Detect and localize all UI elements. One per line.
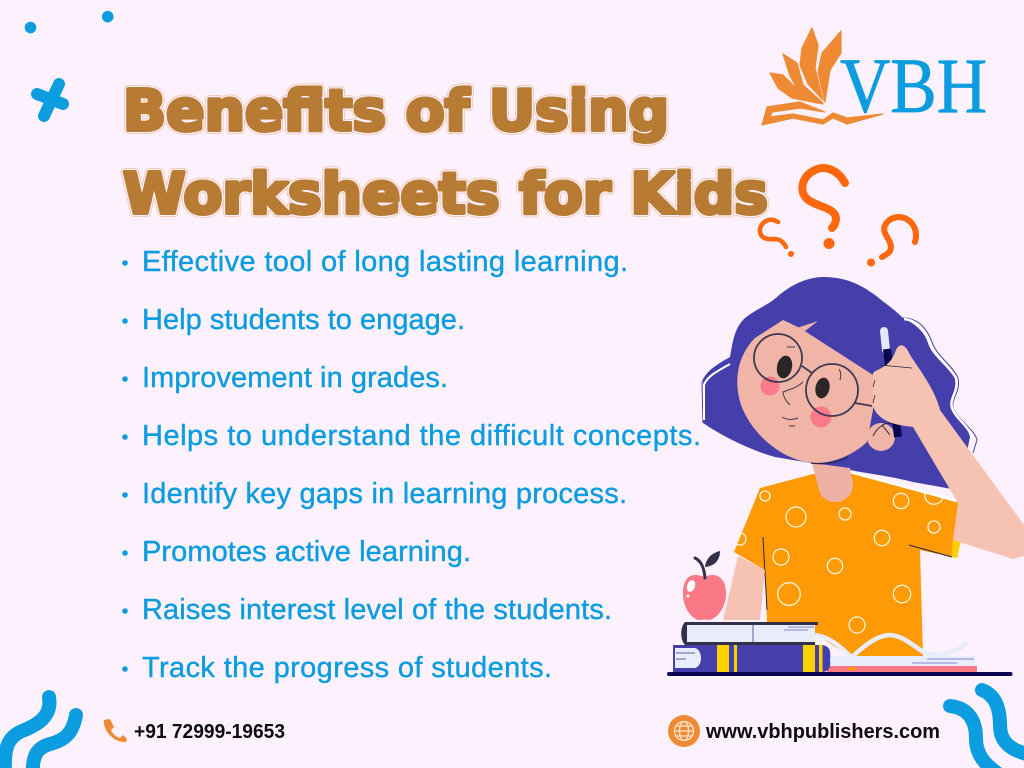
bullet list: Help students to engage. [142,304,465,336]
bullet list: Identify key gaps in learning process. [142,478,627,510]
title: Benefits of Using [123,79,669,144]
bullet list: Helps to understand the difficult concepts. [142,420,701,452]
open book [815,635,977,672]
contact: phone: +91 72999-19653 [134,721,285,743]
bullet list: Raises interest level of the students. [142,594,612,626]
decoration: bottom-left waves [5,697,76,768]
title [123,79,768,227]
icon: glasses [754,334,872,416]
icon: eyes [775,354,832,400]
bullet list [122,246,701,684]
contact: website [668,715,940,747]
title: Worksheets for Kids [123,162,768,227]
neck [812,463,853,502]
bullet list: Effective tool of long lasting learning. [142,246,628,278]
logo wordmark: VBH [840,42,987,129]
decoration: bottom-right waves [950,690,1024,768]
face [737,320,895,464]
icon: logo leaves and book [762,28,883,125]
decoration: blue dots and cross [25,11,114,116]
icon: question marks [760,168,916,266]
bullet list: Improvement in grades. [142,362,448,394]
hair [702,277,977,490]
title: Benefits of Using [123,79,669,144]
logo: VBH [762,28,987,129]
icon: cheeks [760,376,832,428]
bullet list: Track the progress of students. [142,652,552,684]
bullet list: Promotes active learning. [142,536,471,568]
stacked books [673,622,830,672]
icon: globe [668,715,700,747]
apple [683,551,726,620]
table line [667,672,1012,676]
title: Worksheets for Kids [123,162,768,227]
arm and hand [873,345,1024,559]
title: Worksheets for Kids [123,162,768,227]
title: Benefits of Using [123,79,669,144]
icon: phone [104,719,127,742]
shirt [734,472,977,657]
left arm [723,556,765,620]
pen [884,331,898,437]
illustration: girl with books [667,277,1024,676]
contact: website: www.vbhpublishers.com [705,721,940,743]
